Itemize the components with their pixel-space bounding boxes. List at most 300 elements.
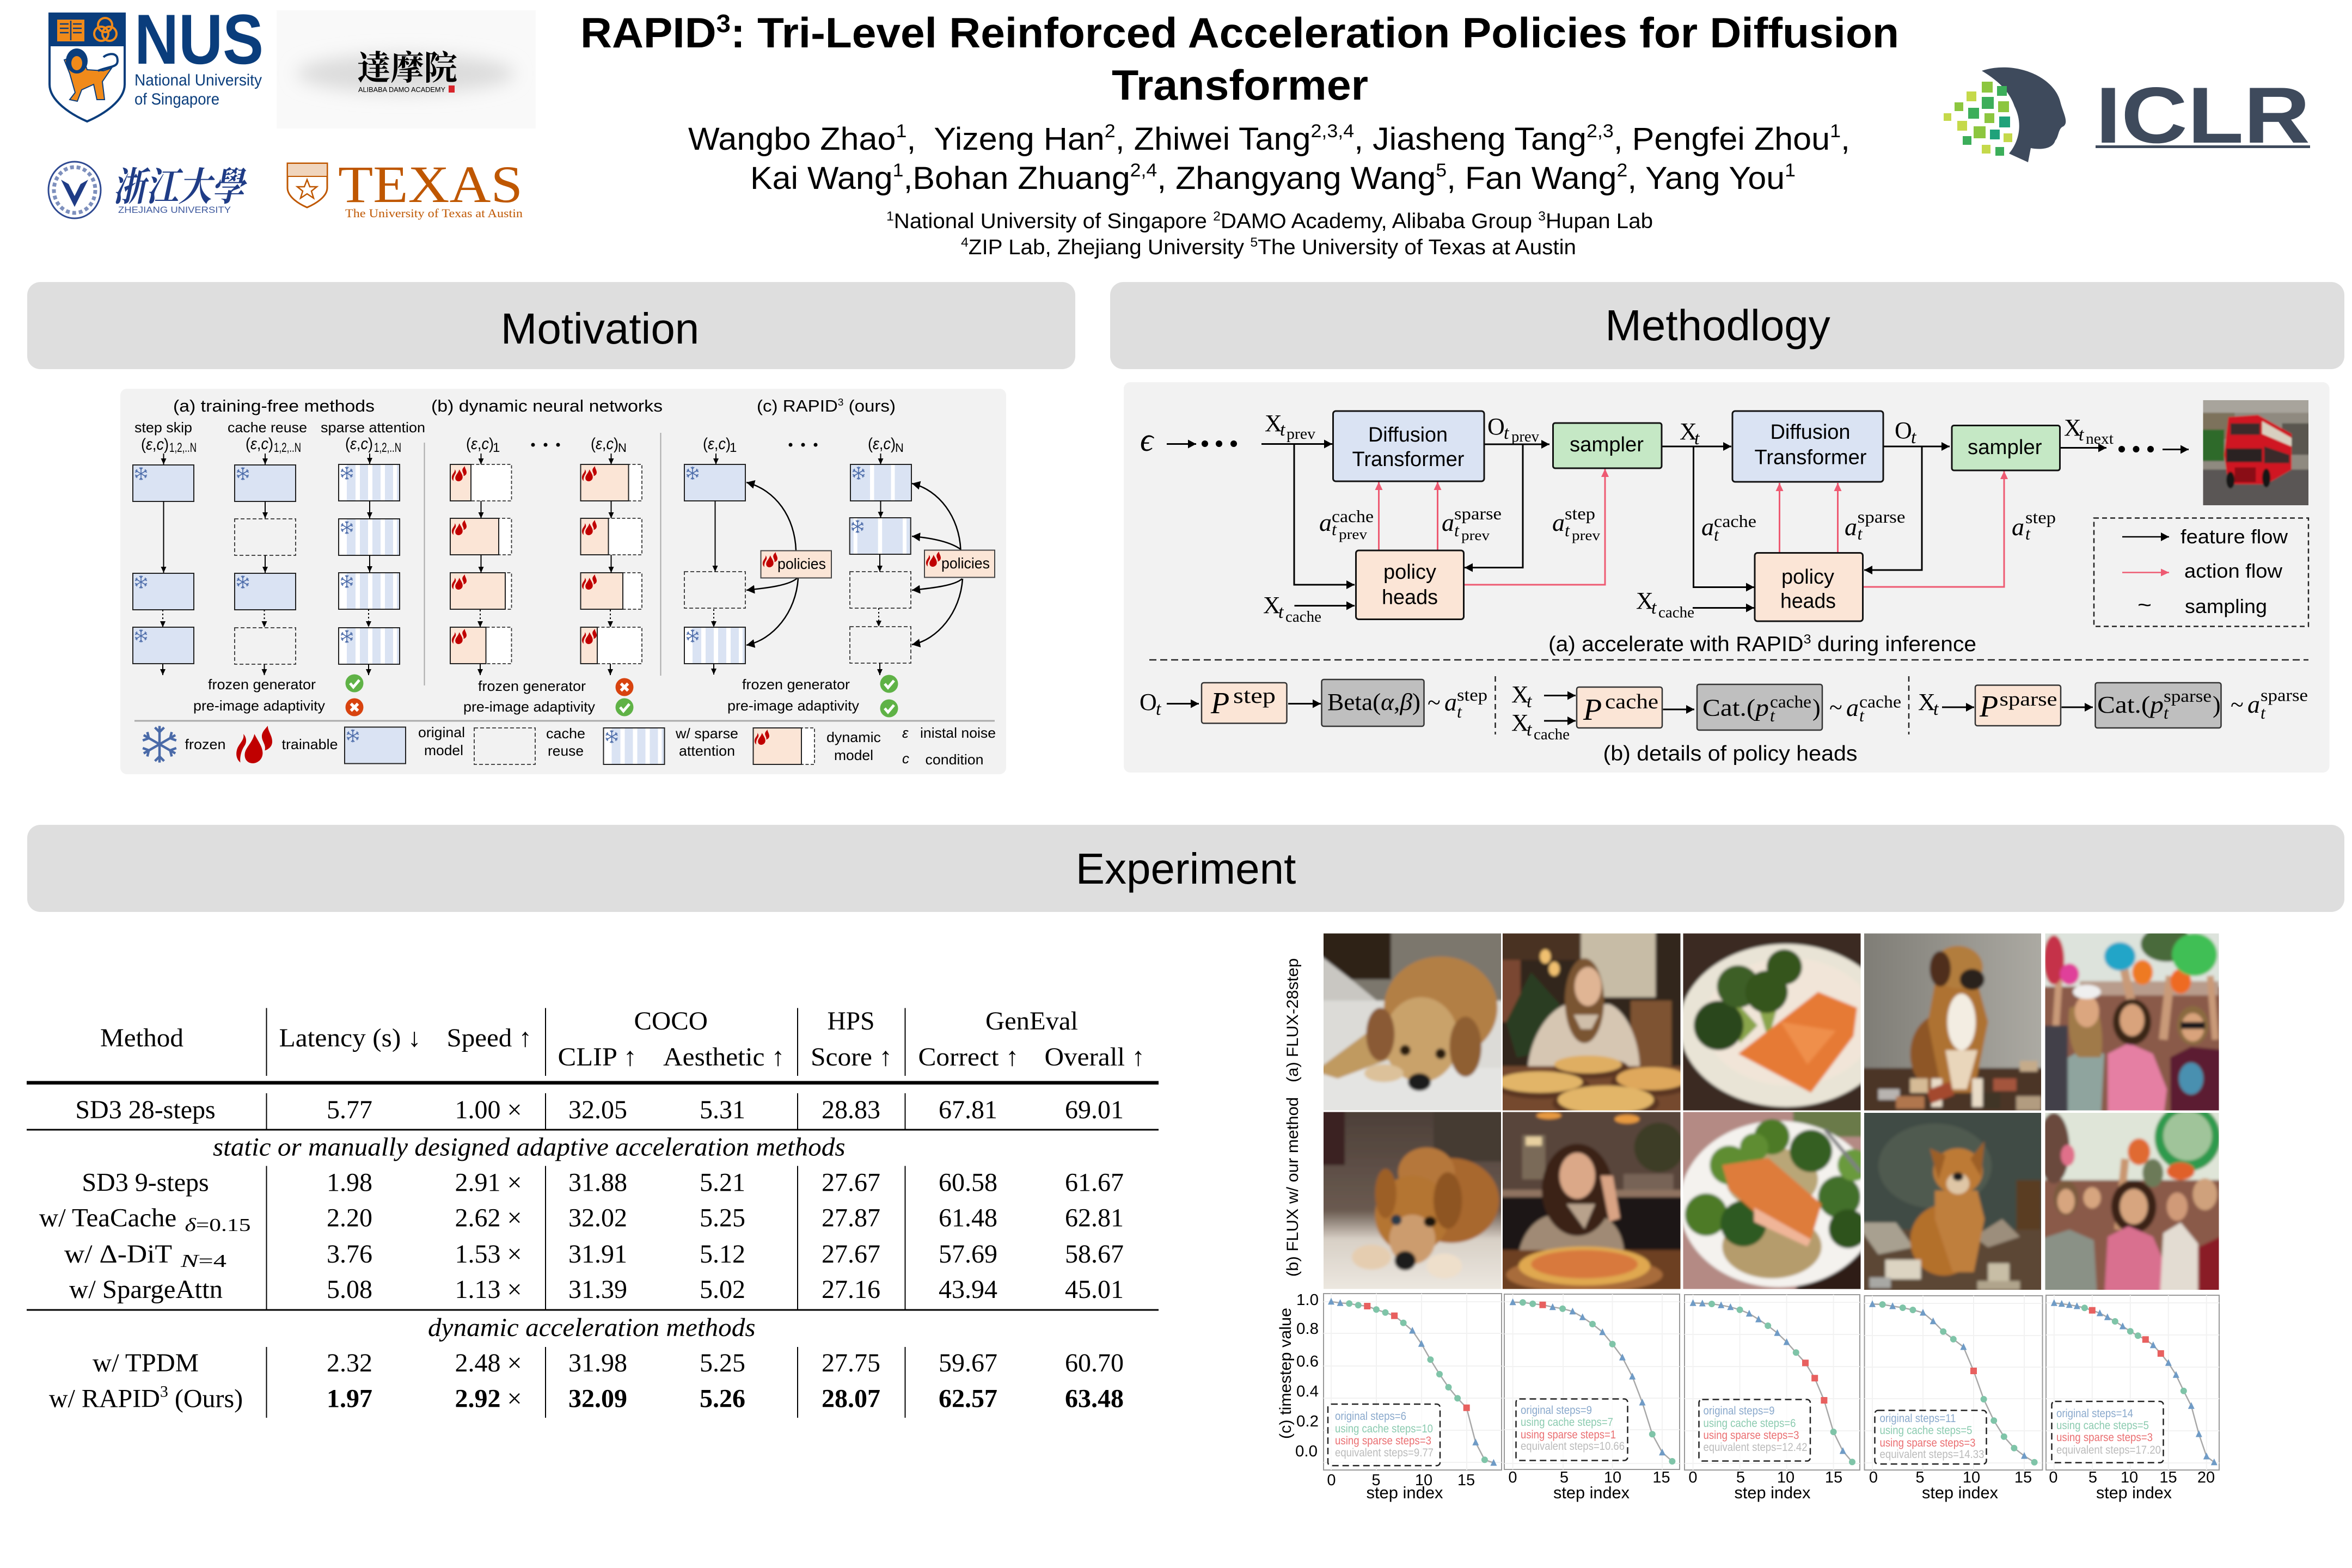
authors: ,Bohan Zhuang	[903, 161, 1130, 196]
legend: motivation: reuse	[548, 743, 584, 759]
title	[580, 9, 1899, 109]
diagram: details of policy heads: sparse	[2261, 685, 2308, 705]
diagram: inference pipeline: X	[1636, 587, 1653, 614]
row: TeaCache: 27.87	[822, 1203, 880, 1233]
authors: , Yang You	[1627, 161, 1785, 196]
chart 3: original steps=9	[1703, 1405, 1775, 1417]
affiliations: ZIP Lab, Zhejiang University	[969, 236, 1250, 259]
title: Transformer	[1112, 61, 1368, 109]
caption (a): during inference	[1811, 633, 1976, 656]
authors: 2,4	[1130, 160, 1157, 181]
logo: NUS: NUS	[134, 0, 264, 79]
chart 1: 0.2	[1296, 1413, 1319, 1430]
chart 1: 0.8	[1296, 1320, 1319, 1338]
legend: motivation: trainable	[282, 736, 338, 752]
authors: Wangbo Zhao	[688, 121, 885, 157]
box: P sparse: P	[1979, 690, 1998, 724]
row: TeaCache: δ=0.15	[185, 1215, 250, 1235]
row: TeaCache: 62.81	[1065, 1203, 1124, 1233]
diagram: inference pipeline: t	[1858, 524, 1863, 543]
box: P step	[1202, 683, 1287, 723]
row: SD3 9-steps: 60.58	[939, 1168, 997, 1197]
diagram: details of policy heads: ~	[1829, 694, 1842, 721]
row: Delta-DiT: N =4	[180, 1251, 226, 1271]
table header: CLIP ↑	[558, 1043, 637, 1071]
diagram: details of policy heads: cache	[1859, 691, 1901, 711]
authors	[688, 121, 1850, 196]
diagram: inference pipeline: a	[2012, 513, 2024, 541]
box: Diffusion Transformer 2	[1732, 411, 1883, 482]
diagram: details of policy heads: t	[1933, 699, 1939, 719]
policies box 2	[924, 550, 995, 577]
heading: RAPID3 ours: (c) RAPID	[757, 396, 833, 415]
row: SD3 28-steps: 32.05	[568, 1095, 627, 1124]
image: festival crowd FLUX-28step	[2045, 933, 2219, 1111]
diagram: inference pipeline: step	[1565, 504, 1595, 523]
authors: 1	[1785, 160, 1796, 181]
chart 4: 10	[1963, 1469, 1980, 1486]
group: dynamic neural network columns	[450, 435, 642, 716]
table header: COCO	[634, 1007, 708, 1036]
chart 3: equivalent steps=12.42	[1703, 1441, 1808, 1454]
box: Beta distribution	[1322, 679, 1424, 726]
diagram: details of policy heads: X	[1511, 709, 1529, 736]
row: SD3 9-steps: 1.98	[327, 1168, 372, 1197]
diagram: inference pipeline: prev	[1339, 526, 1367, 542]
image: dog on bed FLUX-28step	[1324, 933, 1501, 1111]
row: Delta-DiT: 31.91	[568, 1240, 627, 1269]
authors: 1	[896, 121, 906, 142]
group: training-free columns: 1,2,..N	[374, 440, 401, 455]
group: training-free columns: cache reuse	[228, 419, 307, 436]
box: policy heads 2: heads	[1780, 590, 1836, 613]
chart 5: equivalent steps=17.20	[2056, 1444, 2161, 1456]
diagram: inference pipeline: cache	[1714, 511, 1756, 531]
box: Cat cache: )	[1812, 695, 1821, 721]
legend: motivation: original	[418, 724, 465, 740]
box: Cat sparse: sparse	[2164, 686, 2212, 706]
diagram: details of policy heads: X	[1918, 689, 1935, 715]
row: TPDM: 60.70	[1065, 1349, 1124, 1377]
diagram: inference pipeline: X	[2064, 414, 2081, 441]
group: RAPID3 columns: (ε,c)	[868, 435, 896, 453]
caption (b): (b) details of policy heads	[1603, 742, 1858, 765]
row: Delta-DiT	[64, 1240, 1124, 1271]
group: training-free columns: (ε,c)	[246, 435, 273, 453]
chart 1: 15	[1457, 1472, 1475, 1489]
row: SpargeAttn: 31.39	[568, 1275, 627, 1304]
logo: Alibaba DAMO Academy: 達摩院	[357, 41, 457, 89]
group: RAPID3 columns: 1	[730, 440, 737, 455]
group: RAPID3 columns: frozen generator	[742, 676, 850, 693]
logo: ICLR	[1944, 68, 2310, 162]
affiliations: DAMO Academy, Alibaba Group	[1221, 210, 1538, 233]
chart 4: step index	[1922, 1483, 1998, 1502]
table header: Method	[100, 1024, 183, 1052]
legend: motivation	[143, 724, 996, 768]
box: sampler 1: sampler	[1570, 433, 1644, 456]
diagram: inference pipeline: t	[1651, 598, 1657, 618]
box: Cat cache	[1697, 684, 1822, 730]
affiliations	[886, 209, 1653, 259]
group: dynamic neural network columns: 1	[493, 440, 500, 455]
authors: 2,3,4	[1310, 121, 1354, 142]
diagram: inference pipeline: prev	[1572, 528, 1600, 543]
box: Diffusion Transformer 2: Diffusion	[1771, 421, 1850, 444]
row: TeaCache: 2.62 ×	[455, 1203, 522, 1233]
chart 3: 0	[1688, 1469, 1698, 1486]
row: Delta-DiT: 1.53 ×	[455, 1240, 522, 1269]
heading: RAPID3 ours: 3	[838, 397, 843, 408]
legend: flows: feature flow	[2180, 525, 2288, 548]
diagram: inference pipeline: sparse	[1454, 504, 1502, 523]
box: sampler 1	[1553, 423, 1662, 468]
row: Delta-DiT: 58.67	[1065, 1240, 1124, 1269]
group: RAPID3 columns: pre-image adaptivity	[727, 697, 859, 714]
caption (a): (a) accelerate with RAPID	[1548, 633, 1793, 656]
box: P cache	[1577, 687, 1662, 728]
box: Diffusion Transformer 1: Transformer	[1352, 448, 1465, 471]
diagram: inference pipeline: t	[1454, 520, 1460, 540]
table header: Speed ↑	[446, 1024, 532, 1052]
row: RAPID3 ours: 3	[160, 1383, 168, 1400]
diagram: inference pipeline	[1140, 395, 2314, 656]
chart 2: 10	[1604, 1469, 1621, 1486]
legend: motivation: w/ sparse	[675, 725, 738, 742]
heading: dynamic neural networks: (b) dynamic neural networks	[431, 396, 663, 415]
box: Cat sparse: Cat.(p	[2097, 691, 2164, 718]
row: TPDM: 5.25	[700, 1349, 745, 1377]
group: RAPID3 columns: (ε,c)	[703, 435, 731, 453]
chart 2	[1504, 1294, 1680, 1502]
chart 3: step index	[1735, 1483, 1811, 1502]
group: training-free columns: (ε,c)	[345, 435, 373, 453]
chart 3: using sparse steps=3	[1703, 1429, 1799, 1442]
row: SD3 28-steps: 5.77	[327, 1095, 372, 1124]
box: sampler 2	[1952, 426, 2060, 470]
chart 1: 5	[1371, 1472, 1381, 1489]
diagram: details of policy heads: t	[1527, 720, 1533, 740]
section header: Motivation: Motivation	[501, 304, 699, 353]
chart 5: using cache steps=5	[2056, 1419, 2149, 1432]
chart 2: equivalent steps=10.66	[1521, 1440, 1625, 1453]
group: dynamic neural network columns: (ε,c)	[466, 435, 494, 453]
chart 5: 20	[2197, 1469, 2215, 1486]
chart 4	[1864, 1296, 2043, 1502]
diagram: inference pipeline: a	[1845, 513, 1857, 541]
legend: motivation: c	[902, 750, 909, 767]
diagram: details of policy heads: X	[1511, 681, 1529, 708]
diagram: details of policy heads	[1140, 676, 2308, 765]
diagram: inference pipeline: ϵ	[1140, 422, 1155, 458]
diagram: details of policy heads: cache	[1534, 726, 1570, 743]
row: TeaCache: 5.25	[700, 1203, 745, 1233]
diagram: inference pipeline: t	[1714, 525, 1719, 544]
chart 1: 0.4	[1296, 1383, 1319, 1400]
row: Delta-DiT: 57.69	[939, 1240, 997, 1269]
section header: Experiment	[27, 825, 2344, 912]
row: TeaCache	[39, 1203, 1124, 1235]
group: RAPID3 columns	[684, 435, 995, 718]
diagram: details of policy heads: t	[1859, 706, 1865, 725]
row: SD3 28-steps: 1.00 ×	[455, 1095, 522, 1124]
table header: Latency (s) ↓	[279, 1024, 421, 1052]
row: RAPID3 ours: 2.92 ×	[455, 1384, 522, 1413]
chart 2: 5	[1560, 1469, 1569, 1486]
legend: motivation: inistal noise	[920, 725, 996, 741]
group: RAPID3 columns: N	[895, 441, 904, 455]
heading: training-free methods: (a) training-free methods	[173, 396, 375, 415]
chart 2: 15	[1652, 1469, 1670, 1486]
affiliations: 4	[961, 235, 969, 250]
logo: University of Texas at Austin: The University of Texas at Austin	[345, 206, 523, 220]
diagram: inference pipeline: X	[1265, 410, 1282, 437]
chart 5: original steps=14	[2056, 1407, 2133, 1420]
box: policy heads 2: policy	[1781, 566, 1834, 589]
box: Diffusion Transformer 1	[1333, 411, 1484, 481]
legend: motivation: condition	[926, 751, 983, 768]
chart 1: using sparse steps=3	[1335, 1435, 1431, 1447]
diagram: inference pipeline: t	[1504, 423, 1510, 443]
box: Diffusion Transformer 2: Transformer	[1754, 446, 1867, 469]
box: P step: P	[1210, 687, 1229, 720]
diagram: inference pipeline: step	[2025, 507, 2056, 527]
chart 4: equivalent steps=14.33	[1879, 1448, 1984, 1461]
diagram: inference pipeline: cache	[1658, 604, 1694, 621]
group: training-free columns: (ε,c)	[141, 436, 169, 454]
row: SpargeAttn: 5.02	[700, 1275, 745, 1304]
authors: 5	[1436, 160, 1447, 181]
diagram: inference pipeline: O	[1895, 417, 1912, 444]
panel: methodology figure	[1124, 382, 2329, 773]
row: RAPID3 ours: 5.26	[700, 1384, 745, 1413]
row: Delta-DiT: 3.76	[327, 1240, 372, 1269]
diagram: inference pipeline: a	[1701, 513, 1714, 541]
authors: Kai Wang	[750, 161, 886, 196]
chart 1: original steps=6	[1335, 1410, 1406, 1423]
logo: Zhejiang University	[48, 155, 247, 218]
box: policy heads 1: heads	[1382, 586, 1438, 609]
chart 3: 15	[1825, 1469, 1842, 1486]
row: Delta-DiT: w/ Δ-DiT	[64, 1240, 172, 1269]
row: SD3 9-steps	[82, 1168, 1124, 1197]
diagram: details of policy heads: a	[2247, 690, 2260, 718]
image: woman with pizzas FLUX-28step	[1503, 933, 1680, 1111]
row: Delta-DiT: 27.67	[822, 1240, 880, 1269]
section label: static methods: static or manually designed adaptive acceleration methods	[213, 1132, 845, 1162]
row: Delta-DiT: 5.12	[700, 1240, 745, 1269]
chart 3: using cache steps=6	[1703, 1417, 1796, 1430]
heading: RAPID3 ours: (ours)	[843, 396, 896, 415]
diagram: details of policy heads: t	[1457, 702, 1462, 721]
row: RAPID3 ours	[49, 1383, 1124, 1413]
row: SD3 9-steps: 2.91 ×	[455, 1168, 522, 1197]
row: TPDM	[93, 1349, 1124, 1377]
diagram: details of policy heads: ~	[1428, 689, 1441, 716]
group: dynamic neural network columns: pre-image adaptivity	[463, 699, 595, 715]
chart 1: (c) timestep value	[1277, 1308, 1295, 1439]
box: Beta distribution: Beta(α,β)	[1327, 689, 1420, 715]
row: RAPID3 ours: w/ RAPID	[49, 1384, 160, 1413]
chart 4: using cache steps=5	[1879, 1424, 1972, 1437]
group: dynamic neural network columns: N	[618, 441, 627, 455]
diagram: inference pipeline: X	[1263, 592, 1281, 618]
table header: Overall ↑	[1044, 1043, 1145, 1071]
row: TPDM: w/ TPDM	[93, 1349, 199, 1377]
diagram: inference pipeline: t	[2079, 425, 2085, 445]
policies box 2: policies	[941, 555, 990, 572]
image: dog on rug FLUX w/ our method	[1324, 1112, 1501, 1289]
logo: NUS: National University	[134, 71, 262, 89]
diagram: inference pipeline: cache	[1332, 506, 1374, 526]
chart 3	[1685, 1295, 1860, 1502]
diagram: inference pipeline: t	[1278, 602, 1284, 622]
legend: motivation: model	[424, 742, 463, 758]
row: TPDM: 59.67	[939, 1349, 997, 1377]
logo: Zhejiang University: ZHEJIANG UNIVERSITY	[118, 205, 231, 215]
authors: ,	[1841, 121, 1850, 157]
image: salmon and rice FLUX w/ our method	[1683, 1112, 1861, 1289]
legend: motivation: frozen	[185, 736, 225, 752]
diagram: inference pipeline: prev	[1461, 528, 1490, 543]
diagram: details of policy heads: t	[1156, 699, 1162, 719]
diagram: inference pipeline: t	[1332, 519, 1337, 539]
box: policy heads 1: policy	[1383, 561, 1436, 584]
row: SpargeAttn: 45.01	[1065, 1275, 1124, 1304]
table header: HPS	[828, 1007, 874, 1036]
box: P step: step	[1233, 683, 1276, 708]
table header: GenEval	[985, 1007, 1078, 1036]
authors: 1	[1830, 121, 1841, 142]
legend: motivation: cache	[546, 725, 585, 742]
logo: University of Texas at Austin	[287, 155, 523, 220]
image: salmon plate FLUX-28step	[1683, 933, 1861, 1111]
legend: motivation: dynamic	[826, 729, 881, 745]
chart 1: equivalent steps=9.77	[1335, 1447, 1434, 1459]
row: SD3 28-steps: 69.01	[1065, 1095, 1124, 1124]
authors: 2	[1616, 160, 1627, 181]
row: SpargeAttn: 1.13 ×	[455, 1275, 522, 1304]
chart 4: using sparse steps=3	[1879, 1437, 1975, 1449]
box: Cat sparse	[2095, 683, 2221, 728]
caption (a): 3	[1804, 632, 1811, 647]
box: P cache: cache	[1605, 690, 1658, 713]
section header: Methodlogy: Methodlogy	[1605, 301, 1830, 350]
logo: NUS	[50, 0, 264, 121]
row: TPDM: 31.98	[568, 1349, 627, 1377]
table rules	[27, 1008, 1159, 1418]
chart 2: using cache steps=7	[1521, 1416, 1613, 1429]
authors: 1	[893, 160, 903, 181]
box: P sparse	[1975, 685, 2061, 726]
chart 1: step index	[1367, 1483, 1443, 1502]
chart 5: 5	[2088, 1469, 2097, 1486]
row: SD3 28-steps: 5.31	[700, 1095, 745, 1124]
chart 2: using sparse steps=1	[1521, 1429, 1616, 1441]
diagram: inference pipeline: a	[1319, 509, 1332, 536]
box: P sparse: sparse	[1999, 688, 2057, 710]
chart 5: 0	[2049, 1469, 2058, 1486]
policies box 1	[761, 551, 831, 578]
affiliations: 1	[886, 209, 894, 224]
row: TeaCache: 32.02	[568, 1203, 627, 1233]
diagram: inference pipeline: O	[1487, 413, 1505, 440]
image: red double-decker bus output	[2203, 400, 2308, 505]
table header: Score ↑	[811, 1043, 892, 1071]
diagram: inference pipeline: t	[1565, 520, 1570, 540]
diagram: details of policy heads: step	[1457, 685, 1487, 705]
box: Cat sparse: t	[2164, 703, 2169, 722]
table: benchmark results	[27, 1007, 1159, 1418]
chart 3: 5	[1736, 1469, 1745, 1486]
group: training-free columns: step skip	[134, 419, 192, 436]
chart 4: 0	[1869, 1469, 1878, 1486]
row: SD3 9-steps: SD3 9-steps	[82, 1168, 209, 1197]
row: SD3 9-steps: 5.21	[700, 1168, 745, 1197]
logo: NUS: of Singapore	[134, 90, 219, 108]
title: 3	[716, 9, 731, 38]
chart 3: 10	[1777, 1469, 1794, 1486]
diagram: details of policy heads: a	[1444, 688, 1457, 716]
authors: , Jiasheng Tang	[1354, 121, 1587, 157]
title: : Tri-Level Reinforced Acceleration Policies for Diffusion	[731, 9, 1899, 57]
legend: motivation: model	[834, 747, 873, 763]
diagram: inference pipeline: next	[2086, 430, 2114, 448]
table header	[100, 1007, 1145, 1071]
chart 1: 0	[1327, 1472, 1336, 1489]
legend: motivation: attention	[679, 743, 735, 759]
diagram: details of policy heads: t	[1527, 691, 1533, 712]
row: SpargeAttn: 5.08	[327, 1275, 372, 1304]
row: SD3 28-steps	[75, 1095, 1124, 1124]
diagram: details of policy heads: t	[2261, 703, 2266, 722]
box: Cat sparse: )	[2213, 691, 2221, 718]
diagram: inference pipeline: a	[1442, 509, 1454, 536]
label: row b: (b) FLUX w/ our method	[1284, 1097, 1302, 1277]
chart 5: using sparse steps=3	[2056, 1431, 2153, 1444]
diagram: inference pipeline: t	[1694, 428, 1700, 449]
legend: flows: ~	[2137, 594, 2152, 617]
diagram: details of policy heads: ~	[2231, 691, 2244, 718]
row: RAPID3 ours: 63.48	[1065, 1384, 1124, 1413]
section label: dynamic methods: dynamic acceleration methods	[428, 1313, 756, 1342]
row: SD3 9-steps: 31.88	[568, 1168, 627, 1197]
section header: Motivation	[27, 282, 1075, 369]
chart 5	[2046, 1295, 2219, 1502]
diagram: details of policy heads: a	[1846, 694, 1859, 721]
legend: flows	[2094, 518, 2308, 626]
row: SpargeAttn: 27.16	[822, 1275, 880, 1304]
authors: , Zhiwei Tang	[1116, 121, 1310, 157]
group: dynamic neural network columns: frozen generator	[478, 678, 586, 694]
row: SpargeAttn	[69, 1275, 1124, 1304]
logo: University of Texas at Austin: TEXAS	[338, 155, 523, 213]
image: sitting dog FLUX-28step	[1864, 933, 2041, 1111]
diagram: inference pipeline: t	[2025, 524, 2031, 543]
row: SD3 9-steps: 61.67	[1065, 1168, 1124, 1197]
diagram: inference pipeline: a	[1552, 509, 1565, 536]
label: row a: (a) FLUX-28step	[1284, 958, 1302, 1082]
diagram: inference pipeline: prev	[1287, 425, 1316, 443]
chart 1: 0.0	[1295, 1443, 1318, 1460]
logo: Alibaba DAMO Academy	[277, 10, 536, 128]
image: dog in rubble FLUX w/ our method	[1864, 1113, 2041, 1290]
authors: , Zhangyang Wang	[1157, 161, 1436, 196]
chart 4: 5	[1915, 1469, 1925, 1486]
row: SD3 9-steps: 27.67	[822, 1168, 880, 1197]
diagram: inference pipeline: t	[1280, 420, 1286, 440]
group: training-free columns: pre-image adaptivity	[193, 697, 325, 714]
